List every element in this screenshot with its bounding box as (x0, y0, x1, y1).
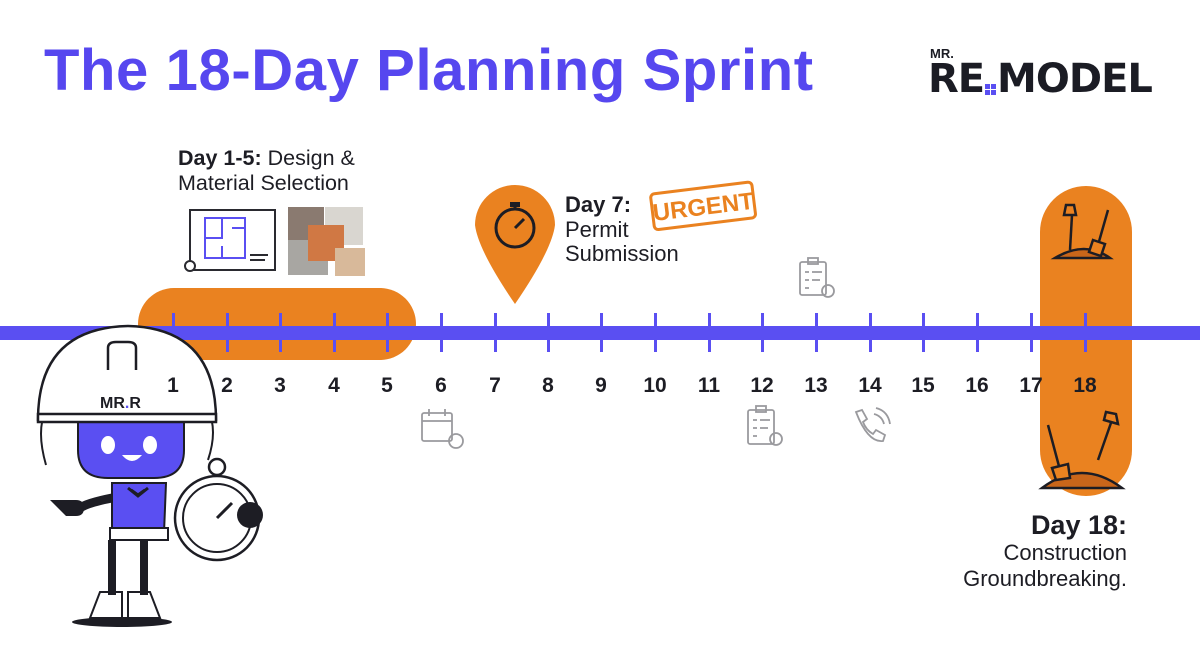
day numbers: 5 (381, 374, 393, 397)
icon: shovels top (1055, 205, 1110, 258)
day 18 highlight (1040, 186, 1132, 496)
day numbers: 11 (698, 374, 720, 397)
day numbers: 18 (1073, 374, 1097, 397)
day 1-5 highlight (138, 288, 416, 360)
text: day 18: Day 18: (1031, 510, 1127, 540)
icon: tile samples (288, 207, 365, 276)
icon: calendar (422, 409, 463, 448)
day numbers: 16 (965, 374, 989, 397)
text: day 18: Groundbreaking. (963, 566, 1127, 591)
day numbers: 14 (858, 374, 882, 397)
icon: shovels bottom (1042, 412, 1122, 488)
icon: clipboard top (800, 258, 834, 297)
text: day 7: Permit (565, 216, 629, 242)
robot mascot (38, 326, 263, 627)
day numbers: 8 (542, 374, 554, 397)
text: days 1-5 (178, 146, 355, 194)
text: day 18 (963, 510, 1127, 591)
text: day 7 (565, 192, 679, 266)
day numbers: 15 (911, 374, 935, 397)
text: days 1-5: Day 1-5: Design & (178, 146, 355, 170)
day numbers: 2 (221, 374, 233, 397)
text: day 7: Submission (565, 241, 679, 266)
day numbers: 10 (643, 374, 667, 397)
day numbers: 12 (750, 374, 774, 397)
day numbers: 3 (274, 374, 286, 397)
day numbers: 6 (435, 374, 447, 397)
day numbers: 17 (1019, 374, 1043, 397)
robot mascot: MR.R (100, 395, 141, 412)
icon: urgent stamp: URGENT (651, 188, 756, 227)
day numbers (167, 374, 1097, 397)
day numbers: 9 (595, 374, 607, 397)
text: day 18: Construction (1003, 540, 1127, 565)
icon: phone (856, 408, 890, 441)
timeline bar (0, 313, 1200, 352)
day numbers: 4 (328, 374, 340, 397)
day numbers: 13 (804, 374, 828, 397)
logo: RE MODEL (928, 56, 1152, 102)
icon: day 7 pin with stopwatch (475, 185, 555, 304)
day numbers: 1 (167, 374, 179, 397)
text: day 7: Day 7: (565, 192, 631, 217)
logo: MR. (930, 46, 954, 61)
icon: blueprint (185, 210, 275, 271)
title: The 18-Day Planning Sprint (44, 38, 814, 103)
icon: clipboard bottom (748, 406, 782, 445)
text: days 1-5: Material Selection (178, 170, 349, 194)
day numbers: 7 (489, 374, 501, 397)
